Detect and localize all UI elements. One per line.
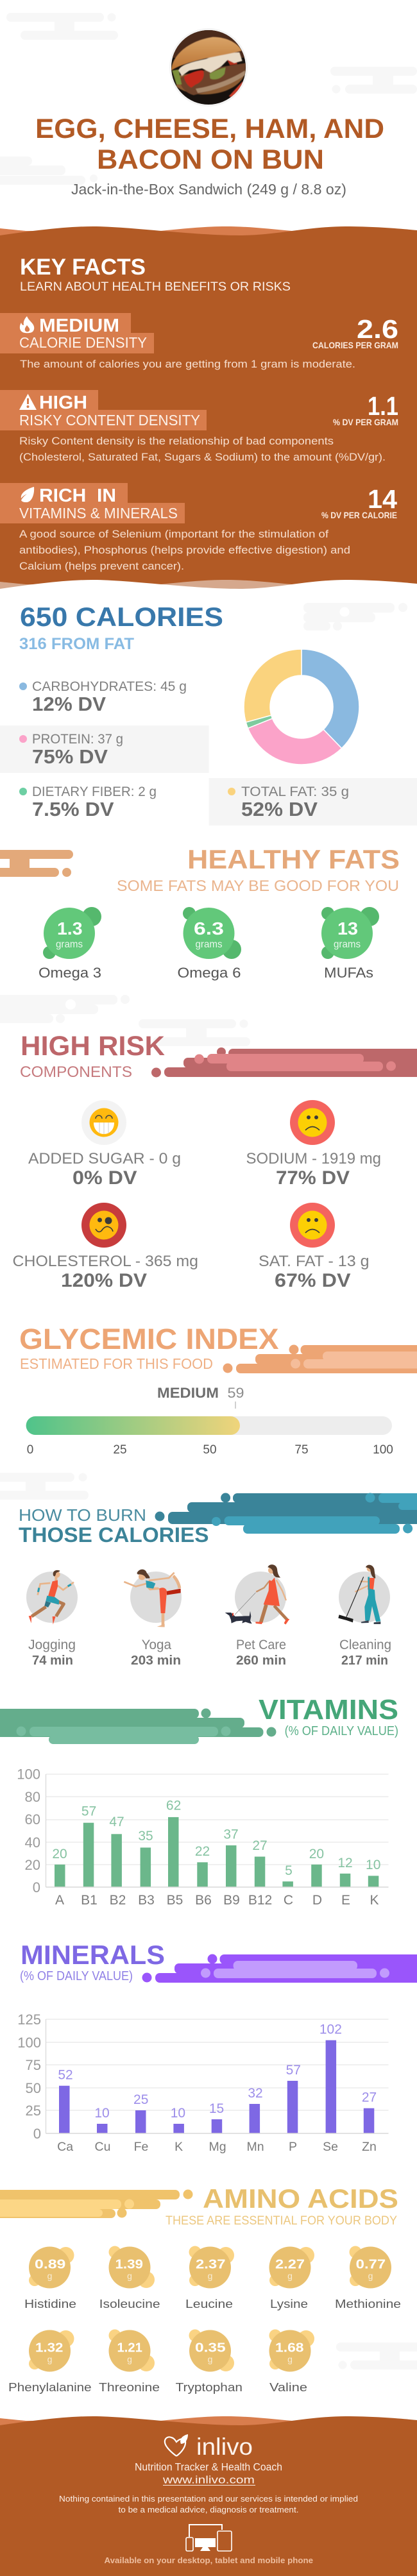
amino: histidine: [24, 2246, 76, 2310]
risk: sodium: 77% DV: [276, 1167, 350, 1189]
panel: how to burn those calories: [19, 1493, 417, 1668]
heading: high risk: [20, 1031, 165, 1081]
legend: carbohydrates: 12% DV: [32, 693, 106, 715]
badge: mufas: 13: [337, 919, 358, 938]
bar chart: minerals: 0: [33, 2126, 41, 2142]
bar chart: minerals: 50: [26, 2080, 41, 2096]
badge: omega 3: [38, 907, 101, 981]
panel: vitamins: [0, 1695, 398, 1908]
bar chart: vitamins: 100: [17, 1766, 40, 1782]
badge: mufas: MUFAs: [324, 965, 373, 981]
fact: risky content density: 1.1: [368, 391, 398, 421]
heading: vitamins: [259, 1695, 398, 1738]
amino: valine: [269, 2330, 314, 2394]
bar chart: vitamins: E: [341, 1893, 350, 1908]
amino: leucine: 2.37: [196, 2258, 226, 2272]
activity: jogging: 74 min: [32, 1654, 73, 1668]
legend: total fat: [209, 778, 417, 826]
badge: omega 3: Omega 3: [38, 965, 101, 981]
panel: healthy fats: [0, 844, 400, 981]
subtitle: Jack-in-the-Box Sandwich (249 g / 8.8 oz): [71, 181, 346, 198]
icon: jogger: [29, 1570, 74, 1625]
panel: glycemic index: [19, 1323, 417, 1457]
disclaimer: to be a medical advice, diagnosis or treatment.: [118, 2505, 299, 2514]
bar chart: vitamins: D: [312, 1893, 322, 1908]
heading: minerals: [20, 1940, 165, 1983]
fact: rich in vitamins and minerals: antibodies), Phosphorus (helps provide effective digestion) and: [19, 544, 350, 556]
badge: omega 3: 1.3: [57, 919, 82, 938]
banner decoration: glycemic index: [223, 1344, 417, 1373]
legend: total fat: TOTAL FAT: 35 g: [241, 784, 349, 799]
amino: phenylalanine: g: [47, 2354, 52, 2364]
bar chart: minerals: 27: [362, 2090, 377, 2105]
amino: valine: g: [287, 2354, 293, 2364]
heading: glycemic index: ESTIMATED FOR THIS FOOD: [20, 1355, 213, 1372]
legend: dietary fiber: [19, 784, 157, 820]
heading: minerals: (% OF DAILY VALUE): [20, 1969, 133, 1983]
amino: valine: Valine: [269, 2381, 307, 2394]
bar chart: minerals: Fe: [134, 2140, 148, 2154]
bar chart: vitamins: 37: [223, 1827, 239, 1842]
heading: burn: [19, 1505, 209, 1546]
bar chart: vitamins: 47: [109, 1815, 124, 1829]
tagline: Nutrition Tracker & Health Coach: [135, 2461, 282, 2473]
gauge: glycemic index: MEDIUM: [157, 1385, 219, 1401]
badge: omega 6: grams: [195, 939, 222, 950]
gauge: glycemic index: 25: [113, 1443, 127, 1457]
fact: rich in vitamins and minerals: Calcium (helps prevent cancer).: [19, 560, 184, 572]
bar chart: vitamins: [17, 1766, 389, 1908]
bar chart: vitamins: B6: [195, 1893, 212, 1908]
amino: tryptophan: g: [208, 2354, 212, 2364]
amino: leucine: [185, 2246, 234, 2310]
activity: pet care: Pet Care: [236, 1638, 286, 1652]
bar chart: vitamins: B5: [167, 1893, 183, 1908]
gauge: glycemic index: [26, 1385, 393, 1457]
fact: rich in vitamins and minerals: % DV PER CALORIE: [321, 510, 397, 520]
amino: methionine: [335, 2246, 401, 2310]
icon: warning: [19, 394, 37, 410]
heading: amino acids: [166, 2183, 398, 2228]
amino: tryptophan: [176, 2330, 243, 2394]
logo: inlivo: [165, 2434, 253, 2460]
amino: threonine: 1.21: [117, 2341, 142, 2355]
gauge: glycemic index: 75: [294, 1443, 309, 1457]
bar chart: vitamins: 80: [25, 1789, 40, 1805]
panel: amino acids: [0, 2183, 401, 2394]
bar chart: minerals: Mn: [246, 2140, 264, 2154]
gauge: glycemic index: 100: [373, 1443, 393, 1457]
heading: amino acids: THESE ARE ESSENTIAL FOR YOUR BODY: [166, 2214, 397, 2228]
activity: yoga: 203 min: [131, 1654, 181, 1668]
bar chart: vitamins: B9: [223, 1893, 240, 1908]
icon: devices: [186, 2525, 232, 2551]
fact: rich in vitamins and minerals: [0, 483, 397, 572]
amino: methionine: Methionine: [335, 2298, 401, 2310]
heading: burn: THOSE CALORIES: [19, 1523, 209, 1546]
gauge: glycemic index: 50: [203, 1443, 217, 1457]
bar chart: vitamins: 12: [337, 1856, 353, 1870]
banner decoration: burn: [155, 1493, 417, 1534]
bar chart: vitamins: B3: [138, 1893, 155, 1908]
activity: pet care: [225, 1564, 289, 1668]
risk: saturated fat: [259, 1203, 370, 1291]
activity: jogging: [26, 1570, 78, 1668]
amino: threonine: g: [127, 2354, 132, 2364]
legend: protein: PROTEIN: 37 g: [32, 732, 123, 747]
amino: valine: 1.68: [275, 2341, 304, 2355]
bar chart: vitamins: 40: [25, 1835, 40, 1851]
activity: cleaning: [338, 1565, 391, 1668]
panel: minerals: [17, 1940, 417, 2154]
fact: rich in vitamins and minerals: RICH IN: [39, 486, 116, 506]
bar chart: minerals: K: [174, 2140, 183, 2154]
gauge: glycemic index: 59: [227, 1385, 244, 1401]
badge: omega 6: [177, 907, 241, 981]
bar chart: minerals: Zn: [362, 2140, 377, 2154]
gauge: glycemic index: 0: [27, 1443, 33, 1457]
bar chart: vitamins: 62: [166, 1799, 181, 1813]
bar chart: vitamins: 27: [252, 1838, 268, 1853]
risk: saturated fat: 67% DV: [275, 1270, 350, 1291]
badge: mufas: [321, 907, 379, 981]
bar chart: vitamins: 20: [52, 1847, 67, 1861]
title: [35, 114, 384, 175]
banner decoration: high risk: [151, 1047, 417, 1078]
bar chart: vitamins: 57: [81, 1804, 96, 1819]
fact: rich in vitamins and minerals: VITAMINS & MINERALS: [19, 505, 178, 521]
bar chart: vitamins: C: [284, 1893, 293, 1908]
amino: isoleucine: g: [127, 2271, 132, 2281]
legend: dietary fiber: DIETARY FIBER: 2 g: [32, 784, 157, 799]
heading: high risk: HIGH RISK: [21, 1031, 165, 1062]
heading: 650 calories: [19, 602, 223, 653]
legend: protein: [0, 725, 209, 773]
risk: saturated fat: SAT. FAT - 13 g: [259, 1253, 370, 1270]
fact: rich in vitamins and minerals: 14: [368, 484, 397, 514]
panel: footer: [0, 2416, 417, 2576]
activity: yoga: [124, 1570, 182, 1668]
bar chart: minerals: P: [289, 2140, 297, 2154]
fact: risky content density: HIGH: [39, 393, 87, 413]
bar chart: vitamins: 0: [33, 1879, 40, 1895]
fact: calorie density: [0, 313, 398, 370]
fact: calorie density: The amount of calories you are getting from 1 gram is moderate.: [20, 358, 355, 370]
legend: carbohydrates: CARBOHYDRATES: 45 g: [32, 679, 187, 694]
heading: glycemic index: GLYCEMIC INDEX: [19, 1323, 279, 1355]
heading: vitamins: (% OF DAILY VALUE): [285, 1724, 398, 1738]
fact: calorie density: MEDIUM: [39, 316, 119, 336]
heading: 650 calories: 650 CALORIES: [20, 602, 223, 632]
amino: phenylalanine: [8, 2330, 92, 2394]
heading: amino acids: AMINO ACIDS: [203, 2183, 398, 2214]
availability note: Available on your desktop, tablet and mobile phone: [104, 2555, 313, 2565]
icon: person sweeping: [338, 1565, 380, 1624]
amino: threonine: [99, 2330, 160, 2394]
risk: added sugar: ADDED SUGAR - 0 g: [28, 1150, 181, 1167]
badge: omega 3: grams: [56, 939, 83, 950]
activity: jogging: Jogging: [28, 1638, 76, 1652]
risk: cholesterol: CHOLESTEROL - 365 mg: [13, 1253, 198, 1270]
amino: histidine: Histidine: [24, 2298, 76, 2310]
amino: tryptophan: Tryptophan: [176, 2381, 243, 2394]
bar chart: vitamins: 10: [366, 1858, 380, 1872]
bar chart: minerals: 75: [26, 2057, 41, 2073]
risk: added sugar: 0% DV: [72, 1167, 137, 1189]
activity: cleaning: 217 min: [341, 1654, 388, 1668]
risk: cholesterol: 120% DV: [61, 1270, 147, 1291]
fact: calorie density: CALORIE DENSITY: [19, 334, 147, 351]
risk: sodium: SODIUM - 1919 mg: [246, 1150, 381, 1167]
banner decoration: vitamins: [0, 1709, 276, 1744]
disclaimer: Nothing contained in this presentation and our services is intended or implied: [59, 2494, 358, 2504]
panel: key facts: [0, 226, 417, 597]
bar chart: minerals: 52: [58, 2068, 73, 2083]
bar chart: minerals: 10: [171, 2106, 185, 2121]
amino: lysine: Lysine: [270, 2298, 308, 2310]
fact: risky content density: [0, 390, 398, 463]
amino: methionine: 0.77: [356, 2258, 386, 2272]
amino: histidine: 0.89: [35, 2258, 65, 2272]
heading: glycemic index: [19, 1323, 279, 1372]
banner decoration: minerals: [142, 1954, 417, 1983]
heading: healthy fats: HEALTHY FATS: [187, 844, 400, 874]
fact: calorie density: 2.6: [357, 314, 398, 344]
bar chart: vitamins: B12: [248, 1893, 272, 1908]
bar chart: vitamins: K: [370, 1893, 379, 1908]
disclaimer: [59, 2494, 358, 2514]
amino: isoleucine: [99, 2246, 160, 2310]
fact: rich in vitamins and minerals: A good source of Selenium (important for the stimulation of: [19, 528, 328, 540]
amino: isoleucine: Isoleucine: [99, 2298, 160, 2310]
amino: tryptophan: 0.35: [195, 2341, 226, 2355]
icon: leaf: [21, 487, 34, 502]
title: BACON ON BUN: [97, 144, 324, 175]
website link: www.inlivo.com: [162, 2473, 255, 2486]
heading: minerals: MINERALS: [21, 1940, 165, 1970]
risk: added sugar: [28, 1100, 181, 1189]
heading: vitamins: VITAMINS: [259, 1695, 398, 1725]
activity: yoga: Yoga: [142, 1638, 171, 1652]
risk: cholesterol: [13, 1203, 198, 1291]
bar chart: minerals: 25: [26, 2103, 41, 2119]
heading: key facts: [20, 255, 291, 294]
heading: key facts: KEY FACTS: [20, 255, 146, 280]
heading: healthy fats: [117, 844, 400, 895]
badge: omega 6: Omega 6: [177, 965, 241, 981]
banner decoration: healthy fats: [0, 850, 73, 877]
legend: total fat: 52% DV: [241, 798, 318, 820]
bar chart: minerals: 25: [133, 2092, 148, 2107]
bar chart: vitamins: B1: [81, 1893, 98, 1908]
icon: dog walker: [225, 1564, 289, 1625]
amino: methionine: g: [368, 2271, 373, 2281]
badge: mufas: grams: [334, 939, 361, 950]
amino: isoleucine: 1.39: [115, 2258, 143, 2272]
activity: pet care: 260 min: [236, 1654, 286, 1668]
fact: risky content density: Risky Content density is the relationship of bad components: [19, 435, 334, 447]
amino: leucine: g: [208, 2271, 212, 2281]
panel: high risk: [13, 1031, 417, 1291]
bar chart: minerals: Ca: [57, 2140, 73, 2154]
donut chart: [244, 649, 359, 765]
bar chart: minerals: 15: [209, 2101, 224, 2116]
amino: lysine: 2.27: [275, 2258, 305, 2272]
fact: risky content density: RISKY CONTENT DENSITY: [19, 412, 200, 428]
bar chart: minerals: 100: [17, 2035, 41, 2051]
bar chart: minerals: 10: [94, 2106, 110, 2121]
legend: protein: 75% DV: [32, 745, 108, 768]
badge: omega 6: 6.3: [194, 919, 224, 938]
bar chart: vitamins: 22: [195, 1844, 210, 1859]
amino: leucine: Leucine: [185, 2298, 233, 2310]
risk: sodium: [246, 1100, 381, 1189]
activity: cleaning: Cleaning: [339, 1638, 391, 1652]
amino: lysine: [269, 2246, 314, 2310]
bar chart: vitamins: B2: [110, 1893, 126, 1908]
bar chart: minerals: 102: [319, 2022, 342, 2037]
panel: calories: [0, 602, 417, 826]
bar chart: minerals: 32: [248, 2086, 263, 2101]
icon: flame: [20, 316, 34, 333]
icon: yoga pose: [124, 1570, 181, 1627]
bar chart: minerals: 57: [286, 2063, 301, 2078]
amino: histidine: g: [47, 2271, 52, 2281]
fact: risky content density: % DV PER GRAM: [333, 417, 398, 427]
bar chart: minerals: Se: [323, 2140, 338, 2154]
amino: phenylalanine: 1.32: [35, 2341, 63, 2355]
food photo: sandwich: [169, 28, 248, 106]
banner decoration: amino acids: [0, 2190, 192, 2218]
amino: phenylalanine: Phenylalanine: [8, 2381, 92, 2394]
bar chart: minerals: 125: [17, 2012, 41, 2028]
bar chart: vitamins: A: [55, 1893, 64, 1908]
amino: threonine: Threonine: [99, 2381, 160, 2394]
bar chart: minerals: Cu: [95, 2140, 110, 2154]
legend: carbohydrates: [19, 679, 187, 715]
logo: inlivo: inlivo: [196, 2434, 253, 2460]
bar chart: minerals: Mg: [208, 2140, 226, 2154]
bar chart: vitamins: 5: [285, 1863, 293, 1878]
title: EGG, CHEESE, HAM, AND: [35, 114, 384, 144]
bar chart: minerals: [17, 2012, 389, 2154]
amino: lysine: g: [287, 2271, 293, 2281]
bar chart: vitamins: 35: [138, 1829, 153, 1843]
heading: high risk: COMPONENTS: [20, 1063, 132, 1081]
bar chart: vitamins: 20: [309, 1847, 324, 1861]
bar chart: vitamins: 20: [25, 1857, 40, 1873]
fact: calorie density: CALORIES PER GRAM: [312, 340, 398, 350]
legend: dietary fiber: 7.5% DV: [32, 798, 114, 820]
bar chart: vitamins: 60: [25, 1811, 40, 1827]
heading: key facts: LEARN ABOUT HEALTH BENEFITS OR RISKS: [20, 280, 291, 294]
heading: 650 calories: 316 FROM FAT: [19, 635, 134, 653]
heading: burn: HOW TO BURN: [19, 1505, 146, 1525]
fact: risky content density: (Cholesterol, Saturated Fat, Sugars & Sodium) to the amount (%DV/gr).: [19, 451, 386, 463]
heading: healthy fats: SOME FATS MAY BE GOOD FOR YOU: [117, 877, 399, 895]
